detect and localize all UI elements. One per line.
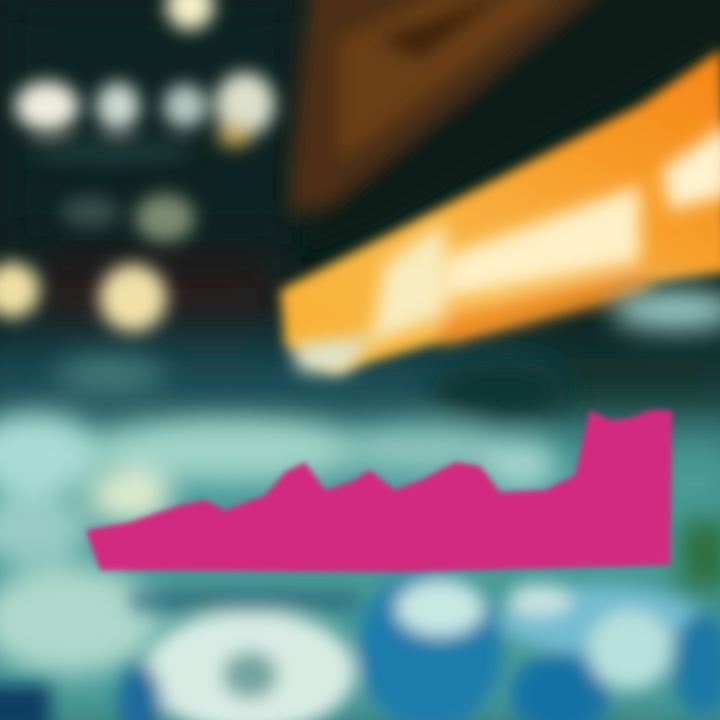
ceiling lights	[0, 0, 275, 332]
pink bar shape	[86, 410, 672, 572]
banner highlights	[290, 122, 720, 374]
orange banner	[280, 48, 720, 372]
crowd: blue and white foreground figures	[0, 570, 720, 720]
ceiling: wooden roof	[290, 0, 720, 255]
crowd: white and teal shapes	[0, 290, 720, 675]
